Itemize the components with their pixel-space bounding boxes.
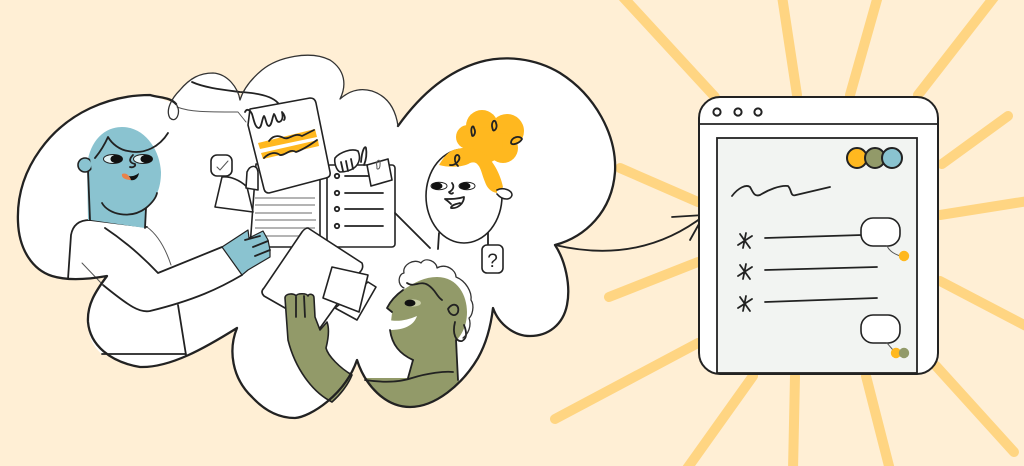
man: head and body	[365, 277, 467, 407]
folder held by man	[262, 228, 363, 328]
heading scribble	[732, 186, 830, 196]
neck and shoulder	[438, 233, 488, 249]
yellow highlighted document	[245, 98, 330, 193]
avatars	[847, 148, 902, 168]
clipboard checklist	[327, 165, 395, 247]
head	[426, 149, 502, 243]
pointing hand fingers	[245, 110, 285, 128]
comment bubble 1	[861, 218, 909, 261]
doctor mouth	[123, 173, 139, 180]
top sleeve	[177, 82, 285, 122]
sheet with lined text	[250, 164, 320, 247]
woman with orange hair	[395, 110, 524, 273]
check box with small hand	[211, 155, 258, 212]
loose papers	[323, 267, 376, 320]
content panel	[717, 138, 917, 373]
woman with orange hair: ?	[487, 251, 498, 272]
sunburst rays	[555, 0, 1024, 466]
ear	[497, 189, 512, 199]
sticky note on clipboard	[367, 159, 392, 186]
connector arrow to window	[555, 215, 705, 251]
doctor: head	[78, 127, 168, 228]
cloud outline: thin top lobes and loop	[168, 55, 398, 126]
eyes	[431, 182, 447, 190]
doctor: lab coat	[68, 220, 242, 355]
doctor eyes	[104, 154, 122, 164]
man: raised hand and arm	[285, 294, 352, 402]
doctor ear	[78, 158, 92, 172]
doctor: glove	[222, 230, 270, 275]
title bar	[699, 108, 938, 124]
man: curly white hair outline	[399, 260, 473, 338]
browser window	[699, 97, 938, 374]
cloud outline: lower and right lobes	[18, 58, 615, 418]
comment bubble 2	[861, 315, 909, 358]
thought cloud fill	[18, 55, 615, 418]
doctor hair line	[95, 133, 168, 158]
mouth	[445, 197, 464, 208]
hair fringe	[439, 148, 503, 193]
hand on clipboard	[335, 147, 366, 172]
list stars and lines	[738, 233, 877, 311]
hair bun	[456, 110, 524, 163]
question tag	[482, 245, 503, 273]
